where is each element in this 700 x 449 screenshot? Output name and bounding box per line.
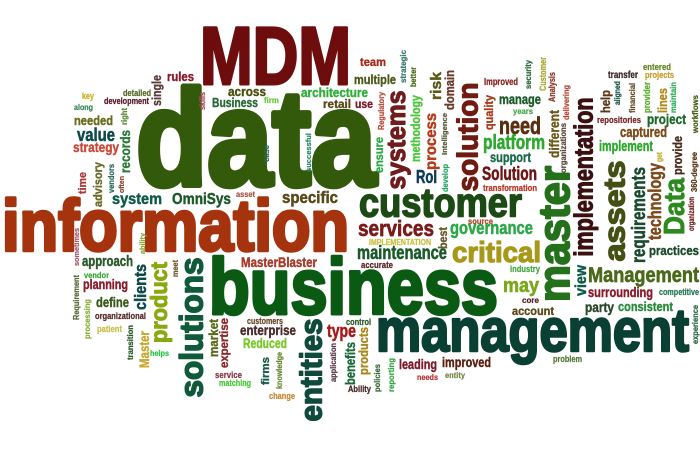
word: better: better bbox=[409, 67, 418, 87]
word: case: case bbox=[262, 144, 271, 162]
word: Analysis: Analysis bbox=[547, 72, 557, 102]
word: surrounding: surrounding bbox=[588, 284, 653, 300]
word: customer: customer bbox=[359, 180, 522, 226]
word: strategy: strategy bbox=[73, 139, 119, 155]
word: services: services bbox=[358, 216, 434, 241]
word: customers: customers bbox=[247, 316, 283, 326]
word: best: best bbox=[436, 227, 450, 249]
word: implement: implement bbox=[599, 138, 653, 155]
word: needs: needs bbox=[417, 372, 438, 382]
word: captured: captured bbox=[620, 124, 667, 141]
word: methodology: methodology bbox=[408, 94, 423, 162]
word: vendor: vendor bbox=[84, 270, 110, 280]
word: products: products bbox=[356, 327, 371, 375]
word: business: business bbox=[209, 242, 498, 330]
word: master: master bbox=[530, 166, 579, 302]
word: vendors: vendors bbox=[106, 164, 116, 193]
word: assets: assets bbox=[598, 160, 632, 262]
word: records: records bbox=[117, 130, 133, 173]
word: provider: provider bbox=[642, 82, 653, 113]
word: often: often bbox=[117, 176, 126, 193]
word: view: view bbox=[573, 265, 590, 296]
word: Intelligence: Intelligence bbox=[440, 113, 449, 155]
word: data: data bbox=[136, 62, 377, 214]
word: accurate: accurate bbox=[361, 260, 393, 271]
word: party: party bbox=[585, 299, 614, 315]
word: organizations: organizations bbox=[559, 122, 568, 173]
word: platform: platform bbox=[483, 132, 545, 154]
word: sometimes: sometimes bbox=[72, 228, 81, 266]
word: reporting: reporting bbox=[386, 358, 396, 392]
word: approach: approach bbox=[82, 253, 133, 270]
word: transfer: transfer bbox=[608, 70, 638, 81]
word: critical: critical bbox=[452, 237, 541, 269]
word: matching: matching bbox=[219, 378, 251, 388]
word: MasterBlaster: MasterBlaster bbox=[241, 254, 317, 270]
word: specific: specific bbox=[282, 188, 338, 207]
word: needed: needed bbox=[74, 113, 113, 128]
word: get: get bbox=[655, 152, 664, 162]
word: IMPLEMENTATION: IMPLEMENTATION bbox=[369, 238, 431, 247]
word: Master: Master bbox=[136, 331, 152, 368]
word: may: may bbox=[503, 275, 540, 297]
word: policies: policies bbox=[373, 363, 382, 392]
word: skills: skills bbox=[198, 92, 207, 110]
word: OmniSys: OmniSys bbox=[172, 191, 231, 208]
word: risk: risk bbox=[428, 71, 445, 100]
word: transition: transition bbox=[125, 325, 135, 360]
word: advisory: advisory bbox=[91, 162, 105, 207]
word: Solution: Solution bbox=[482, 164, 537, 185]
word: enterprise: enterprise bbox=[240, 322, 296, 338]
word: ensure: ensure bbox=[372, 137, 386, 173]
word: improved: improved bbox=[442, 354, 491, 370]
word: governance: governance bbox=[450, 218, 533, 238]
word: experience: experience bbox=[691, 304, 700, 344]
word: patient: patient bbox=[97, 324, 122, 334]
word: maintain: maintain bbox=[668, 82, 678, 113]
word: right: right bbox=[120, 108, 129, 125]
word: Customer: Customer bbox=[538, 57, 548, 91]
word: consistent: consistent bbox=[618, 299, 674, 314]
word: project: project bbox=[647, 111, 686, 127]
word: years: years bbox=[513, 106, 533, 116]
word: architecture: architecture bbox=[301, 85, 368, 100]
word: quality: quality bbox=[482, 95, 496, 130]
word: entities: entities bbox=[294, 318, 328, 422]
word: organizational: organizational bbox=[95, 311, 146, 322]
word: time: time bbox=[77, 172, 89, 194]
word: need: need bbox=[499, 113, 541, 140]
word: Regulatory: Regulatory bbox=[376, 92, 386, 130]
word: asset: asset bbox=[236, 190, 255, 199]
word: clients: clients bbox=[131, 264, 150, 310]
word: develop: develop bbox=[440, 164, 450, 192]
word: Improved: Improved bbox=[484, 77, 518, 88]
word: account: account bbox=[512, 304, 554, 318]
word: problem: problem bbox=[553, 354, 582, 364]
word: strategic: strategic bbox=[399, 49, 408, 83]
word: process: process bbox=[423, 113, 440, 170]
word: application: application bbox=[329, 343, 338, 382]
word: along: along bbox=[74, 102, 93, 112]
word: aligned: aligned bbox=[612, 81, 622, 105]
word: Requirement: Requirement bbox=[71, 275, 81, 320]
word: Data: Data bbox=[659, 177, 691, 235]
word: change: change bbox=[269, 391, 295, 401]
word: source: source bbox=[468, 216, 493, 226]
word: solutions: solutions bbox=[174, 258, 210, 398]
word: use: use bbox=[355, 97, 373, 111]
word: solution (vertical): solution bbox=[452, 82, 484, 192]
word: requirements: requirements bbox=[629, 167, 650, 263]
word: detailed: detailed bbox=[123, 88, 151, 99]
word: delivering: delivering bbox=[561, 85, 571, 120]
word: technology: technology bbox=[645, 163, 665, 240]
word: RoI: RoI bbox=[416, 167, 437, 187]
word: industry: industry bbox=[510, 264, 540, 274]
word: entered: entered bbox=[643, 62, 671, 73]
word: firm: firm bbox=[264, 96, 279, 105]
word: support: support bbox=[490, 149, 531, 165]
word: expertise: expertise bbox=[217, 318, 231, 368]
word: workflows: workflows bbox=[690, 95, 700, 134]
word: meet: meet bbox=[171, 260, 180, 277]
word: retail: retail bbox=[323, 97, 351, 111]
word: firms: firms bbox=[260, 357, 272, 385]
word: Reduced: Reduced bbox=[243, 335, 287, 351]
word: product: product bbox=[146, 262, 172, 343]
word: systems: systems bbox=[383, 90, 411, 190]
word: domain: domain bbox=[443, 70, 457, 110]
word: core: core bbox=[522, 296, 540, 305]
word: knowledge: knowledge bbox=[275, 352, 284, 389]
word: market: market bbox=[206, 318, 221, 357]
word: repositories: repositories bbox=[597, 115, 641, 125]
word: key: key bbox=[82, 91, 94, 101]
word: help: help bbox=[598, 90, 613, 113]
word: successful: successful bbox=[304, 133, 313, 172]
word: development: development bbox=[104, 96, 150, 107]
word: helps: helps bbox=[150, 348, 169, 358]
word: across: across bbox=[228, 84, 266, 99]
word: rules: rules bbox=[167, 70, 194, 84]
word: control: control bbox=[346, 317, 371, 327]
word: transformation: transformation bbox=[483, 183, 537, 193]
word: MDM: MDM bbox=[200, 11, 351, 102]
word: financial: financial bbox=[628, 83, 637, 113]
word: define: define bbox=[96, 294, 129, 310]
word: leading: leading bbox=[399, 356, 437, 372]
word: lines: lines bbox=[655, 88, 670, 113]
word: manage: manage bbox=[499, 91, 541, 107]
word: provide: provide bbox=[670, 136, 685, 175]
word: different: different bbox=[546, 110, 562, 158]
word: single: single bbox=[150, 75, 164, 106]
word: benefits: benefits bbox=[342, 342, 358, 385]
word: Ability: Ability bbox=[348, 384, 371, 394]
word: projects: projects bbox=[645, 70, 674, 80]
word: Business: Business bbox=[212, 95, 258, 110]
word: service: service bbox=[215, 370, 242, 380]
word: entity: entity bbox=[445, 370, 465, 380]
word: value: value bbox=[77, 125, 115, 145]
word: ability: ability bbox=[138, 232, 147, 254]
word: implementation: implementation bbox=[570, 98, 598, 256]
word: team: team bbox=[360, 55, 386, 69]
word: 360-degree: 360-degree bbox=[690, 151, 699, 192]
word: processing: processing bbox=[83, 299, 92, 339]
word: type: type bbox=[327, 321, 356, 341]
word: organization: organization bbox=[687, 197, 696, 231]
word: planning: planning bbox=[83, 276, 128, 292]
word: multiple: multiple bbox=[354, 72, 396, 87]
word: maintenance: maintenance bbox=[357, 243, 447, 264]
word: information: information bbox=[2, 186, 349, 266]
word: security: security bbox=[523, 60, 533, 89]
word: system: system bbox=[112, 191, 162, 208]
